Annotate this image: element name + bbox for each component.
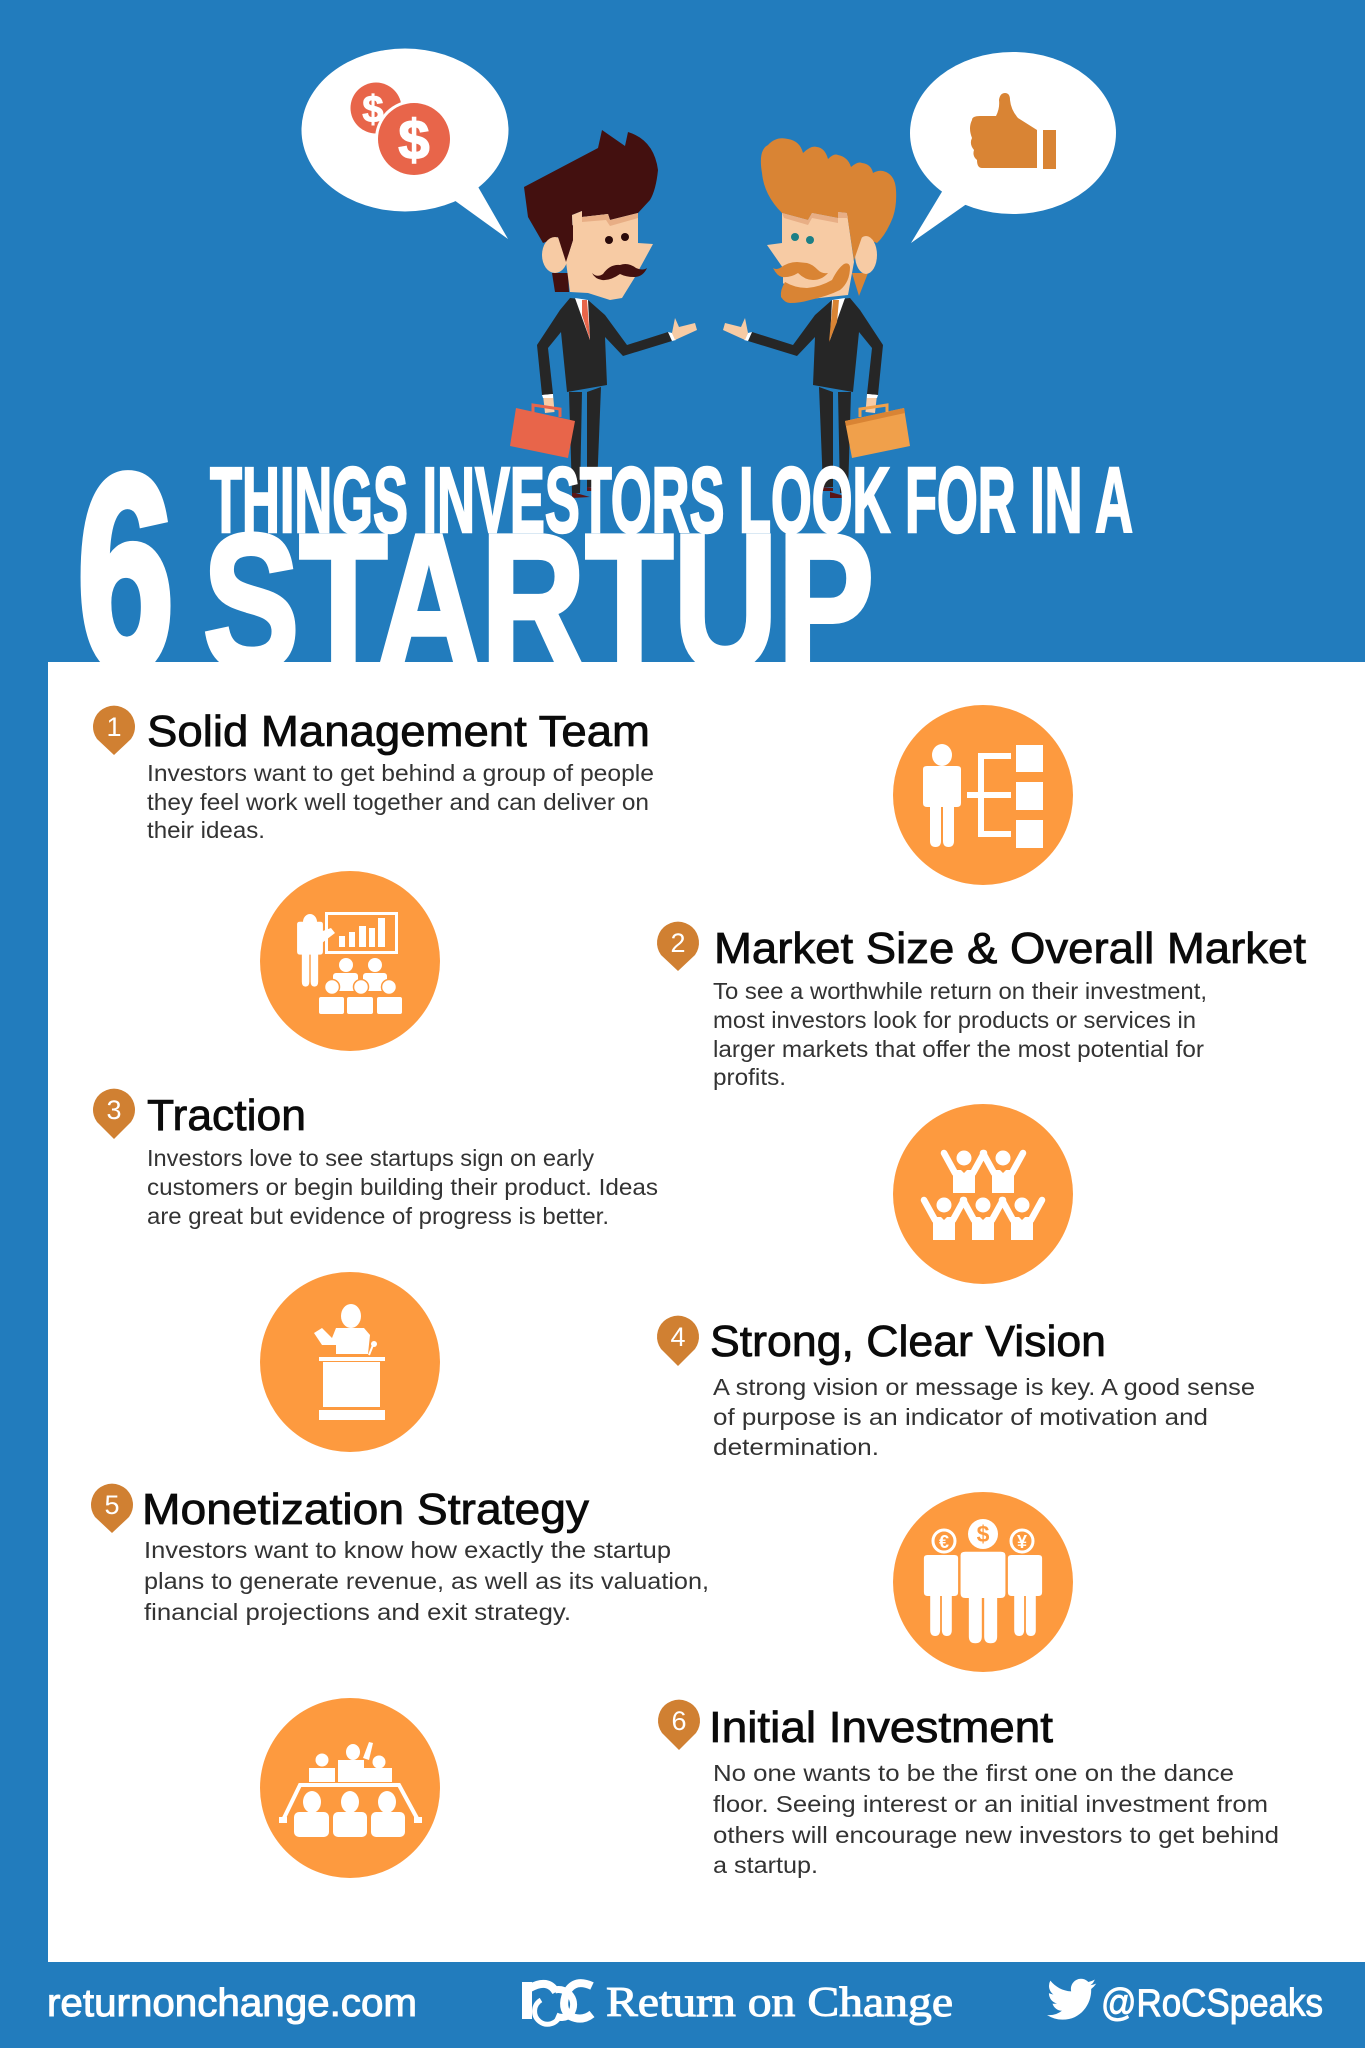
title xyxy=(77,417,1133,727)
body 4 xyxy=(713,1374,1255,1460)
item 1: solid management team xyxy=(93,706,654,843)
body 2: profits. xyxy=(713,1064,786,1090)
body 2 xyxy=(713,978,1207,1090)
number pin 6 xyxy=(658,1700,700,1750)
heading 3: Traction xyxy=(147,1091,306,1140)
icon circle: speaker at podium xyxy=(260,1272,440,1452)
body 1: they feel work well together and can deliver on xyxy=(147,789,649,815)
title numeral 6: 6 xyxy=(77,417,174,727)
body 2: To see a worthwhile return on their investment, xyxy=(713,978,1207,1004)
icon: small dollar coin: $ xyxy=(362,89,384,131)
currency coins: € xyxy=(939,1532,949,1552)
item 2: market size xyxy=(657,922,1306,1090)
body 1 xyxy=(147,760,654,843)
character: orange haired investor xyxy=(723,138,910,498)
item 3: traction xyxy=(93,1089,658,1229)
item 4: strong clear vision xyxy=(657,1316,1255,1460)
face xyxy=(767,212,854,300)
character: dark haired investor xyxy=(510,130,697,498)
icon: small dollar coin xyxy=(350,82,402,134)
heading 4: Strong, Clear Vision xyxy=(710,1317,1106,1366)
speech bubble: thumbs up xyxy=(910,52,1116,243)
item 6: initial investment xyxy=(658,1700,1279,1878)
heading 6: Initial Investment xyxy=(709,1703,1053,1752)
body 1: their ideas. xyxy=(147,817,265,843)
body 1: Investors want to get behind a group of people xyxy=(147,760,654,786)
footer xyxy=(47,1979,1323,2026)
hair lock over face and shadow xyxy=(782,212,862,260)
face xyxy=(566,211,653,300)
white content panel xyxy=(48,662,1365,1962)
icon circle: investors with currencies xyxy=(893,1492,1073,1672)
number pin 2: 2 xyxy=(670,928,686,958)
number pin 1 xyxy=(93,706,135,755)
briefcase xyxy=(510,405,575,458)
icon circle: boardroom table xyxy=(260,1698,440,1878)
ear and neck hair xyxy=(542,237,569,292)
item 5: monetization strategy xyxy=(91,1484,709,1625)
body 6: floor. Seeing interest or an initial investment from xyxy=(713,1791,1268,1817)
body 5: plans to generate revenue, as well as its valuation, xyxy=(144,1568,709,1594)
currency coins: $ xyxy=(977,1521,990,1547)
icon: large dollar coin xyxy=(375,100,453,178)
body 6: a startup. xyxy=(713,1852,818,1878)
body 5 xyxy=(144,1537,709,1625)
hair lock xyxy=(852,273,868,296)
body 6: others will encourage new investors to get behind xyxy=(713,1822,1279,1848)
icon circle: team arms raised xyxy=(893,1104,1073,1284)
body 2: larger markets that offer the most potential for xyxy=(713,1036,1204,1062)
body 4: A strong vision or message is key. A good sense xyxy=(713,1374,1255,1400)
heading 2: Market Size & Overall Market xyxy=(714,924,1306,973)
body 3: are great but evidence of progress is better. xyxy=(147,1203,609,1229)
icon: thumbs up xyxy=(970,93,1056,169)
currency coins: ¥ xyxy=(1017,1532,1027,1552)
body 3: Investors love to see startups sign on early xyxy=(147,1145,594,1171)
speech bubble: money xyxy=(302,48,508,239)
suit, arms and legs xyxy=(723,298,883,493)
body 4: of purpose is an indicator of motivation and xyxy=(713,1404,1208,1430)
icon: large dollar coin: $ xyxy=(398,108,430,171)
body 3 xyxy=(147,1145,658,1229)
icon circle: presenter and audience xyxy=(260,871,440,1051)
number pin 6: 6 xyxy=(671,1706,687,1736)
body 5: Investors want to know how exactly the startup xyxy=(144,1537,671,1563)
body 4: determination. xyxy=(713,1434,879,1460)
moustache xyxy=(592,264,647,280)
number pin 3: 3 xyxy=(106,1095,122,1125)
eyes xyxy=(605,233,629,244)
heading 1: Solid Management Team xyxy=(147,707,650,756)
briefcase xyxy=(845,405,910,458)
currency coins xyxy=(933,1519,1033,1552)
ear xyxy=(855,236,877,274)
tie xyxy=(582,300,590,340)
website: returnonchange.com xyxy=(47,1982,417,2025)
body 2: most investors look for products or services in xyxy=(713,1007,1196,1033)
eyes xyxy=(791,233,814,244)
sideburn and hair shadow xyxy=(558,213,638,262)
title line two: STARTUP xyxy=(203,494,874,709)
logo mark xyxy=(522,1982,592,2024)
shoes xyxy=(572,487,598,498)
moustache xyxy=(773,262,828,280)
body 5: financial projections and exit strategy. xyxy=(144,1599,571,1625)
number pin 1: 1 xyxy=(106,712,122,742)
number pin 5: 5 xyxy=(104,1490,120,1520)
tie xyxy=(829,300,839,342)
icon: bird xyxy=(1047,1979,1096,2020)
brand name: Return on Change xyxy=(606,1980,953,2026)
beard xyxy=(781,263,850,303)
number pin 5 xyxy=(91,1484,133,1533)
number pin 2 xyxy=(657,922,699,971)
body 6 xyxy=(713,1760,1279,1878)
body 3: customers or begin building their product. Ideas xyxy=(147,1174,658,1200)
hair xyxy=(761,138,896,260)
social handle: @RoCSpeaks xyxy=(1101,1982,1323,2025)
number pin 4 xyxy=(657,1316,699,1366)
body 6: No one wants to be the first one on the dance xyxy=(713,1760,1234,1786)
shoes xyxy=(822,487,848,498)
heading 5: Monetization Strategy xyxy=(142,1485,589,1534)
suit, arms and legs xyxy=(537,298,697,493)
icon circle: manager and org chart xyxy=(893,705,1073,885)
number pin 3 xyxy=(93,1089,135,1139)
number pin 4: 4 xyxy=(670,1322,686,1352)
hair xyxy=(524,130,658,262)
